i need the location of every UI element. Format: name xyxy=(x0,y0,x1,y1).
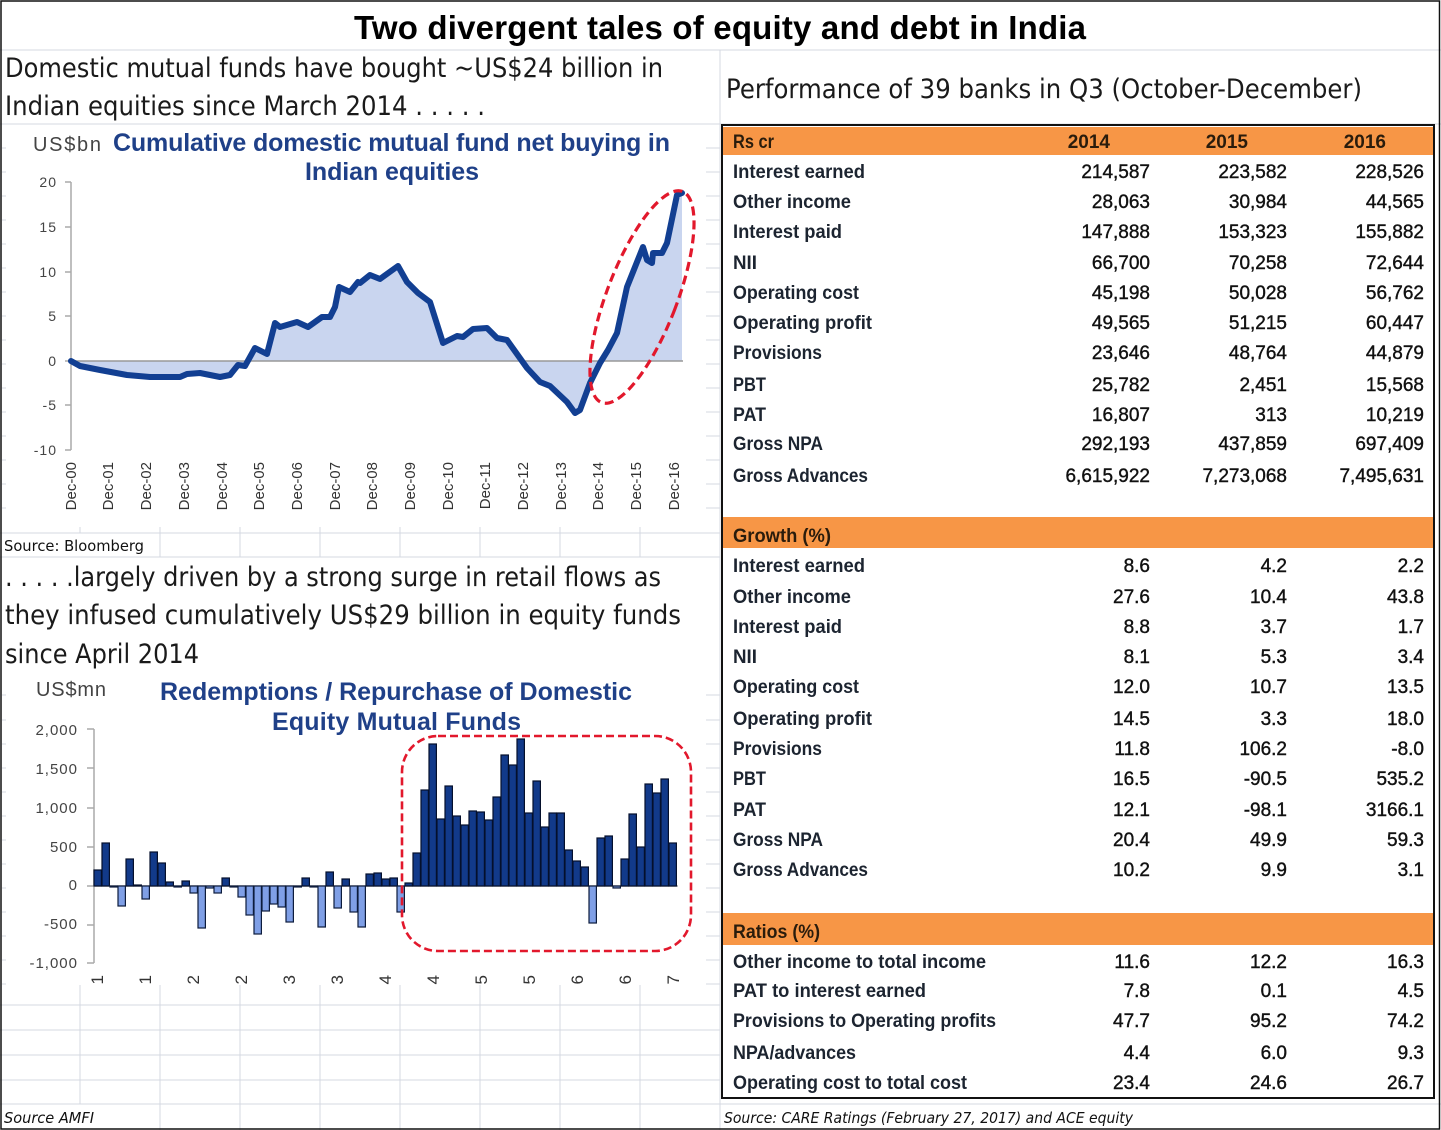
header row: Rs cr: 2015 xyxy=(1206,132,1248,153)
row: Provisions to Operating profits: 95.2 xyxy=(1250,1011,1287,1032)
header row: Ratios: Ratios (%) xyxy=(733,922,820,943)
row: PAT: 16,807 xyxy=(1092,405,1150,426)
x axis labels: 2 xyxy=(232,975,251,984)
chart heading xyxy=(160,678,632,736)
row: Other income to total income xyxy=(733,952,1424,973)
x axis labels: 5 xyxy=(520,975,539,984)
x axis labels: Dec-13 xyxy=(553,462,570,510)
row: PAT: PAT xyxy=(733,800,766,821)
row: Gross Advances xyxy=(733,860,1424,881)
row: Gross Advances: Gross Advances xyxy=(733,860,868,881)
row: Operating cost: 10.7 xyxy=(1250,677,1287,698)
x axis labels: 1 xyxy=(88,975,107,984)
row: NII: 72,644 xyxy=(1366,253,1424,274)
row: Operating cost: 12.0 xyxy=(1113,677,1150,698)
row: NII: NII xyxy=(733,647,757,668)
y axis: -5 xyxy=(43,397,57,413)
row: Interest earned: 4.2 xyxy=(1261,556,1287,577)
row: Interest paid: Interest paid xyxy=(733,617,842,638)
row: NII: 5.3 xyxy=(1261,647,1287,668)
x axis labels: 5 xyxy=(472,975,491,984)
row: Gross NPA: 20.4 xyxy=(1113,830,1150,851)
row: PAT to interest earned: PAT to interest earned xyxy=(733,981,926,1002)
row: NPA/advances: 9.3 xyxy=(1398,1043,1424,1064)
row: Provisions: Provisions xyxy=(733,739,822,760)
row: Operating cost to total cost xyxy=(733,1073,1424,1094)
chart heading xyxy=(113,129,670,186)
row: Gross NPA: 49.9 xyxy=(1250,830,1287,851)
row: Operating profit xyxy=(733,313,1424,334)
row: Interest earned: 8.6 xyxy=(1124,556,1150,577)
row: NII: NII xyxy=(733,253,757,274)
row: NII: 66,700 xyxy=(1092,253,1150,274)
row: Other income: Other income xyxy=(733,192,851,213)
row: Interest paid: 147,888 xyxy=(1081,222,1150,243)
y axis: 0 xyxy=(69,877,78,894)
red dashed rounded rectangle highlight xyxy=(402,736,691,951)
panel: bank performance table xyxy=(722,125,1434,1098)
x axis labels: 2 xyxy=(184,975,203,984)
row: Operating cost: Operating cost xyxy=(733,283,860,304)
header row: Rs cr: Rs cr xyxy=(733,132,775,153)
x axis labels: 4 xyxy=(376,975,395,984)
y axis: 5 xyxy=(48,308,57,324)
x axis labels: 6 xyxy=(568,975,587,984)
y axis xyxy=(34,174,71,458)
row: Interest earned: Interest earned xyxy=(733,162,865,183)
row: NII: 8.1 xyxy=(1124,647,1150,668)
row: PAT to interest earned xyxy=(733,981,1424,1002)
row: Provisions: 106.2 xyxy=(1239,739,1287,760)
row: Interest paid: Interest paid xyxy=(733,222,842,243)
y axis: -1,000 xyxy=(29,955,78,972)
x axis labels: Dec-01 xyxy=(100,462,117,510)
row: Other income xyxy=(733,192,1424,213)
row: Gross NPA xyxy=(733,830,1424,851)
y axis: 2,000 xyxy=(35,722,78,739)
row: Other income: 30,984 xyxy=(1229,192,1287,213)
row: Other income: 10.4 xyxy=(1250,587,1287,608)
row: Provisions to Operating profits: Provisions to Operating profits xyxy=(733,1011,996,1032)
row: NII xyxy=(733,253,1424,274)
row: Other income: 44,565 xyxy=(1366,192,1424,213)
row: Gross Advances: 7,495,631 xyxy=(1339,466,1424,487)
row: Provisions xyxy=(733,739,1424,760)
row: Provisions: 11.8 xyxy=(1114,739,1150,760)
row: Operating cost: Operating cost xyxy=(733,677,860,698)
row: Other income to total income: 12.2 xyxy=(1250,952,1287,973)
monthly bars xyxy=(94,739,676,934)
x axis labels: Dec-16 xyxy=(666,462,683,510)
row: Gross NPA xyxy=(733,434,1424,455)
row: PAT to interest earned: 4.5 xyxy=(1398,981,1424,1002)
row: Gross NPA: 437,859 xyxy=(1218,434,1287,455)
row: Gross NPA: 697,409 xyxy=(1355,434,1424,455)
row: PBT: PBT xyxy=(733,375,766,396)
row: Other income to total income: 16.3 xyxy=(1387,952,1424,973)
cumulative net buying line xyxy=(71,193,682,413)
row: PAT xyxy=(733,800,1424,821)
x axis labels: Dec-11 xyxy=(477,462,494,509)
chart unit: US$mn xyxy=(36,679,106,701)
row: Interest paid: 8.8 xyxy=(1124,617,1150,638)
row: Provisions: 23,646 xyxy=(1092,343,1150,364)
panel: redemptions and repurchase bar chart xyxy=(29,678,691,984)
x axis labels: 3 xyxy=(280,975,299,984)
row: Gross Advances: 9.9 xyxy=(1261,860,1287,881)
row: Interest earned: 228,526 xyxy=(1355,162,1424,183)
x axis labels: 1 xyxy=(136,975,155,984)
row: PBT: 25,782 xyxy=(1092,375,1150,396)
row: PAT to interest earned: 0.1 xyxy=(1261,981,1287,1002)
row: PBT: 15,568 xyxy=(1366,375,1424,396)
y axis: 1,000 xyxy=(35,800,78,817)
row: Provisions: 44,879 xyxy=(1366,343,1424,364)
chart unit: US$bn xyxy=(33,134,101,156)
row: Interest paid: 3.7 xyxy=(1261,617,1287,638)
row: Operating profit: 3.3 xyxy=(1261,709,1287,730)
row: NPA/advances xyxy=(733,1043,1424,1064)
row: Gross NPA: Gross NPA xyxy=(733,434,823,455)
text block: retail flows summary: they infused cumulatively US$29 billion in equity funds xyxy=(5,600,681,631)
source: Bloomberg: Source: Bloomberg xyxy=(4,537,144,555)
row: PAT: 313 xyxy=(1255,405,1287,426)
chart heading: Indian equities xyxy=(305,158,479,186)
row: Operating profit: Operating profit xyxy=(733,709,873,730)
text block: retail flows summary: . . . . .largely driven by a strong surge in retail flows as xyxy=(5,562,661,593)
row: Operating cost: 13.5 xyxy=(1387,677,1424,698)
y axis: 10 xyxy=(39,264,57,280)
row: NPA/advances: 4.4 xyxy=(1124,1043,1150,1064)
row: Operating profit: 14.5 xyxy=(1113,709,1150,730)
row: Interest paid xyxy=(733,222,1424,243)
x axis labels: Dec-06 xyxy=(289,462,306,510)
section: Growth xyxy=(723,517,1433,881)
row: NII: 70,258 xyxy=(1229,253,1287,274)
row: Operating cost to total cost: 23.4 xyxy=(1113,1073,1150,1094)
row: Operating cost xyxy=(733,677,1424,698)
chart heading: Redemptions / Repurchase of Domestic xyxy=(160,678,632,706)
row: NII xyxy=(733,647,1424,668)
row: Interest earned: 223,582 xyxy=(1218,162,1287,183)
row: Interest paid: 153,323 xyxy=(1218,222,1287,243)
section: Ratios xyxy=(723,913,1433,1094)
panel: cumulative mutual fund line chart xyxy=(33,129,715,510)
x axis labels: Dec-15 xyxy=(628,462,645,510)
row: Provisions to Operating profits xyxy=(733,1011,1424,1032)
row: Provisions to Operating profits: 74.2 xyxy=(1387,1011,1424,1032)
row: Operating cost to total cost: 26.7 xyxy=(1387,1073,1424,1094)
x axis labels: Dec-03 xyxy=(176,462,193,510)
row: Provisions to Operating profits: 47.7 xyxy=(1113,1011,1150,1032)
row: Gross Advances: 3.1 xyxy=(1398,860,1424,881)
row: Gross NPA: 59.3 xyxy=(1387,830,1424,851)
source: CARE Ratings: Source: CARE Ratings (February 27, 2017) and ACE equity xyxy=(724,1109,1134,1127)
row: Gross Advances: 10.2 xyxy=(1113,860,1150,881)
row: Interest paid: 1.7 xyxy=(1398,617,1424,638)
y axis: -500 xyxy=(44,916,78,933)
title: Two divergent tales of equity and debt in India xyxy=(354,9,1087,46)
x axis labels: 6 xyxy=(616,975,635,984)
x axis labels: Dec-14 xyxy=(590,462,607,510)
row: Operating cost: 56,762 xyxy=(1366,283,1424,304)
row: Interest paid: 155,882 xyxy=(1355,222,1424,243)
row: PAT: 3166.1 xyxy=(1366,800,1424,821)
text block: mutual fund summary: Indian equities since March 2014 . . . . . xyxy=(5,91,485,122)
y axis xyxy=(29,722,94,972)
x axis labels: Dec-00 xyxy=(63,462,80,510)
row: Gross NPA: 292,193 xyxy=(1081,434,1150,455)
row: Operating profit: Operating profit xyxy=(733,313,873,334)
y axis: 500 xyxy=(50,839,78,856)
x axis labels: Dec-12 xyxy=(515,462,532,510)
row: Gross Advances: 6,615,922 xyxy=(1065,466,1150,487)
row: Operating profit xyxy=(733,709,1424,730)
row: Other income to total income: Other income to total income xyxy=(733,952,986,973)
x axis labels: 3 xyxy=(328,975,347,984)
row: Interest earned xyxy=(733,162,1424,183)
row: Other income: 28,063 xyxy=(1092,192,1150,213)
row: PBT: 2,451 xyxy=(1239,375,1287,396)
x axis labels: Dec-10 xyxy=(440,462,457,510)
x axis labels: Dec-04 xyxy=(214,462,231,510)
y axis: -10 xyxy=(34,442,57,458)
source: AMFI: Source AMFI xyxy=(4,1109,95,1127)
row: NPA/advances: 6.0 xyxy=(1261,1043,1287,1064)
row: Operating cost: 50,028 xyxy=(1229,283,1287,304)
row: Interest earned: Interest earned xyxy=(733,556,865,577)
row: Gross NPA: Gross NPA xyxy=(733,830,823,851)
y axis: 1,500 xyxy=(35,761,78,778)
row: Operating profit: 49,565 xyxy=(1092,313,1150,334)
x axis labels: Dec-02 xyxy=(138,462,155,510)
row: Other income to total income: 11.6 xyxy=(1114,952,1150,973)
header row: Rs cr: 2016 xyxy=(1344,132,1386,153)
row: PAT: 10,219 xyxy=(1366,405,1424,426)
x axis labels: Dec-09 xyxy=(402,462,419,510)
x axis labels: 7 xyxy=(664,975,683,984)
row: Operating profit: 51,215 xyxy=(1229,313,1287,334)
area under line xyxy=(71,193,682,413)
x axis labels: Dec-05 xyxy=(251,462,268,510)
row: Other income: 43.8 xyxy=(1387,587,1424,608)
header row: Growth xyxy=(723,517,1433,548)
chart heading: Cumulative domestic mutual fund net buying in xyxy=(113,129,670,157)
red dashed ellipse highlight xyxy=(569,179,715,415)
chart heading: Equity Mutual Funds xyxy=(272,708,521,736)
y axis: 0 xyxy=(48,353,57,369)
row: NII: 3.4 xyxy=(1398,647,1424,668)
header row: Ratios xyxy=(723,913,1433,945)
row: Operating cost: 45,198 xyxy=(1092,283,1150,304)
row: Operating cost to total cost: Operating cost to total cost xyxy=(733,1073,968,1094)
row: PAT: PAT xyxy=(733,405,766,426)
x axis labels xyxy=(88,975,683,984)
row: Interest earned xyxy=(733,556,1424,577)
row: PBT: 16.5 xyxy=(1113,769,1150,790)
row: Gross Advances: 7,273,068 xyxy=(1202,466,1287,487)
row: Other income xyxy=(733,587,1424,608)
row: Interest earned: 214,587 xyxy=(1081,162,1150,183)
row: Provisions: 48,764 xyxy=(1229,343,1287,364)
row: Other income: Other income xyxy=(733,587,851,608)
row: Operating profit: 18.0 xyxy=(1387,709,1424,730)
y axis: 20 xyxy=(39,174,57,190)
header row: Growth: Growth (%) xyxy=(733,526,831,547)
text block: retail flows summary xyxy=(5,562,681,670)
table heading: Performance of 39 banks in Q3 (October-December) xyxy=(726,74,1362,105)
text block: mutual fund summary xyxy=(5,53,663,122)
x axis labels: 4 xyxy=(424,975,443,984)
row: Provisions: Provisions xyxy=(733,343,822,364)
row: Operating profit: 60,447 xyxy=(1366,313,1424,334)
x axis labels xyxy=(63,462,683,510)
row: PAT to interest earned: 7.8 xyxy=(1124,981,1150,1002)
row: PAT: 12.1 xyxy=(1113,800,1150,821)
y axis: 15 xyxy=(39,219,57,235)
text block: mutual fund summary: Domestic mutual funds have bought ~US$24 billion in xyxy=(5,53,663,84)
row: PBT: 535.2 xyxy=(1376,769,1424,790)
row: NPA/advances: NPA/advances xyxy=(733,1043,856,1064)
x axis labels: Dec-07 xyxy=(327,462,344,510)
text block: retail flows summary: since April 2014 xyxy=(5,639,199,670)
row: PAT: -98.1 xyxy=(1244,800,1287,821)
row: PBT xyxy=(733,375,1424,396)
row: Gross Advances: Gross Advances xyxy=(733,466,868,487)
row: PBT: -90.5 xyxy=(1244,769,1287,790)
row: Other income: 27.6 xyxy=(1113,587,1150,608)
header row: Rs cr: 2014 xyxy=(1068,132,1110,153)
row: PAT xyxy=(733,405,1424,426)
row: PBT xyxy=(733,769,1424,790)
row: Operating cost to total cost: 24.6 xyxy=(1250,1073,1287,1094)
row: Interest paid xyxy=(733,617,1424,638)
x axis labels: Dec-08 xyxy=(364,462,381,510)
row: Provisions: -8.0 xyxy=(1391,739,1424,760)
section: Rs cr xyxy=(723,127,1433,487)
row: PBT: PBT xyxy=(733,769,766,790)
row: Interest earned: 2.2 xyxy=(1398,556,1424,577)
row: Provisions xyxy=(733,343,1424,364)
row: Gross Advances xyxy=(733,466,1424,487)
header row: Rs cr xyxy=(723,127,1433,155)
row: Operating cost xyxy=(733,283,1424,304)
